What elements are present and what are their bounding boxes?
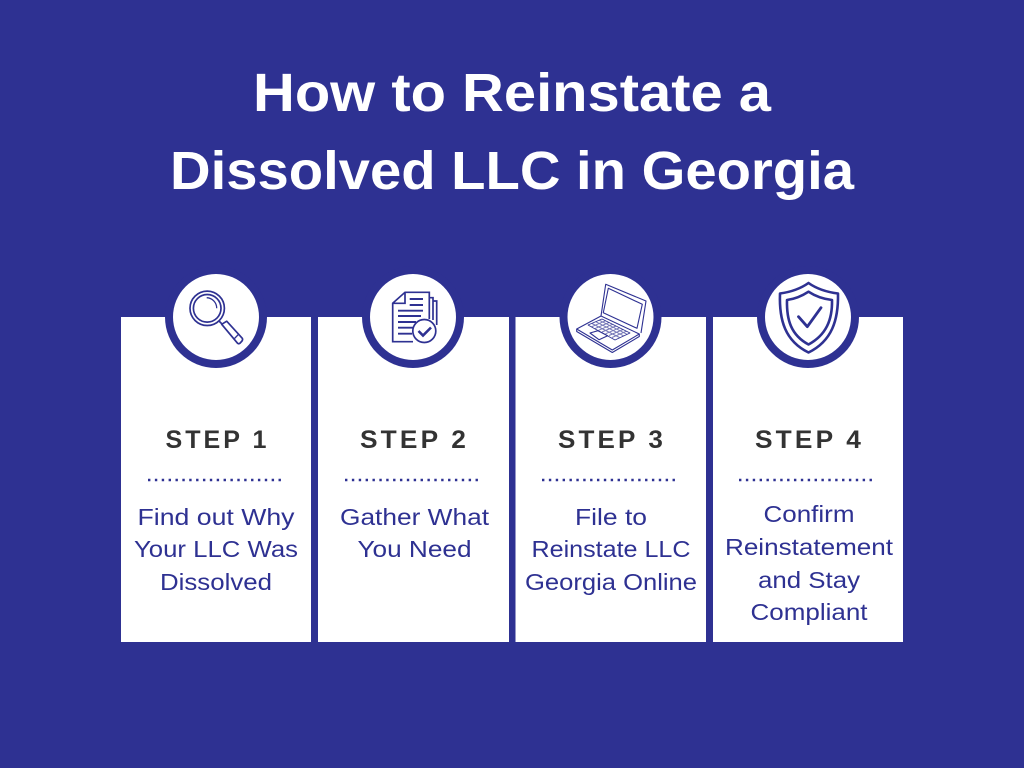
title: How to Reinstate a — [253, 63, 772, 123]
step text: Find out Why — [138, 504, 295, 530]
dotted divider — [542, 479, 675, 481]
step text: Confirm — [764, 501, 854, 527]
step text: File to — [575, 504, 647, 530]
step text: Compliant — [750, 599, 868, 625]
panel: step 4 — [713, 266, 903, 642]
step text — [134, 504, 298, 595]
step text — [725, 501, 894, 625]
panel: step 2 — [318, 266, 509, 642]
icon: shield with check — [780, 283, 838, 352]
step text: Reinstatement — [725, 534, 894, 560]
step text: Georgia Online — [525, 569, 697, 595]
step text — [340, 504, 490, 562]
step text: Your LLC Was — [134, 536, 298, 562]
step label: STEP 4 — [755, 426, 864, 454]
step label: STEP 2 — [360, 426, 469, 454]
step text: You Need — [358, 536, 472, 562]
dotted divider — [345, 479, 478, 481]
step label: STEP 3 — [558, 426, 666, 454]
panel: step 1 — [121, 266, 311, 642]
step text: Dissolved — [160, 569, 272, 595]
step text — [525, 504, 697, 595]
icon: laptop — [577, 284, 646, 352]
panel: step 3 — [516, 266, 706, 642]
dotted divider — [148, 479, 281, 481]
icon: magnifying glass — [190, 291, 243, 344]
title — [170, 63, 855, 201]
step text: and Stay — [758, 567, 861, 593]
icon: documents with check — [393, 292, 437, 342]
step text: Reinstate LLC — [532, 536, 690, 562]
step text: Gather What — [340, 504, 490, 530]
title: Dissolved LLC in Georgia — [170, 141, 855, 201]
step label: STEP 1 — [166, 426, 270, 454]
dotted divider — [739, 479, 872, 481]
